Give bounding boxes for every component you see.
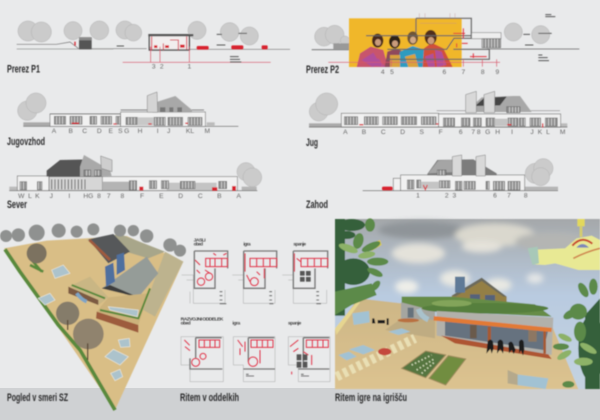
label: Ritem v oddelkih: Ritem v oddelkih [180, 392, 239, 404]
elevation: Jug: 7 8 [471, 129, 481, 136]
elevation: Sever: W [18, 193, 25, 200]
orange pergola [434, 318, 552, 330]
elevation: Jugovzhod: KL [186, 128, 194, 135]
elevation: Jug: K [538, 129, 543, 136]
elevation: Sever: E [159, 193, 164, 200]
label: Prerez P1: Prerez P1 [7, 64, 40, 76]
silhouettes [372, 318, 524, 356]
sky [335, 219, 600, 389]
main building [102, 257, 158, 297]
label: Pogled v smeri SZ: Pogled v smeri SZ [7, 392, 68, 404]
elevation: Jugovzhod: H [138, 128, 143, 135]
elevation: Jugovzhod: I [157, 128, 159, 135]
plan titles: obed [181, 321, 191, 327]
elevation: Sever: 8 [120, 193, 124, 200]
top row red furniture [195, 253, 328, 286]
elevation: Zahod [363, 155, 558, 199]
plan titles: spanje [293, 242, 306, 248]
elevation: Jug [309, 91, 567, 136]
elevation: Jug: B [362, 129, 367, 136]
section with poster: Prerez P2: 5 [390, 69, 394, 76]
elevation: Sever: K [35, 193, 40, 200]
band figures [357, 30, 453, 67]
flower beds [402, 351, 446, 378]
label: Ritem igre na igrišču: Ritem igre na igrišču [335, 392, 407, 404]
plan titles [181, 238, 306, 327]
section with poster: Prerez P2: 8 [481, 69, 485, 76]
bottom row plan walls [190, 338, 329, 369]
elevation: Jugovzhod: S [118, 128, 123, 135]
plan titles: obed [194, 242, 203, 248]
elevation: Jug: D [400, 129, 405, 136]
elevation: Sever: A [236, 193, 241, 200]
elevation: Sever [9, 155, 262, 200]
elevation: Zahod: 6 [493, 192, 497, 199]
clouds [378, 221, 588, 293]
elevation: Jugovzhod [18, 92, 238, 135]
solar roof block [88, 234, 130, 263]
top row plan walls [194, 251, 328, 288]
green roof [402, 297, 552, 317]
elevation: Sever: HG [83, 193, 93, 200]
elevation: Jugovzhod: E [108, 128, 113, 135]
section with poster: Prerez P2: 4 [381, 69, 385, 76]
elevation: Jugovzhod: J [167, 128, 170, 135]
floor plans: Ritem v oddelkih [181, 238, 330, 382]
elevation: Sever: C [198, 193, 203, 200]
elevation: Jug: A [343, 129, 348, 136]
elevation: Zahod: 7 [507, 192, 511, 199]
site ground [4, 236, 183, 410]
elevation: Zahod: 8 [524, 192, 528, 199]
trees [315, 23, 550, 46]
elevation: Jugovzhod: D [97, 128, 102, 135]
section with poster: Prerez P2: 7 [461, 69, 465, 76]
plan titles: spanje [288, 321, 302, 327]
elevation: Sever: 7 [107, 193, 111, 200]
pavilion [437, 311, 553, 355]
ground [335, 298, 578, 389]
section with poster: Prerez P2: 6 [442, 69, 446, 76]
elevation: Sever: F [140, 193, 144, 200]
elevation: Jugovzhod: C [82, 128, 87, 135]
plan titles: igra [232, 321, 241, 327]
elevation: Jug: H [495, 129, 500, 136]
elevation: Sever: B [217, 193, 222, 200]
section with poster: Prerez P2 [312, 13, 579, 76]
section with poster: Prerez P2: 9 [495, 69, 499, 76]
elevation: Zahod: 2 [445, 192, 449, 199]
elevation: Sever: D [178, 193, 183, 200]
small wing [401, 302, 435, 320]
elevation: Jug: J [530, 129, 534, 136]
elevation: Jug: 6 [459, 129, 463, 136]
elevation: Jug: L [546, 129, 550, 136]
section drawing: Prerez P1: 1 [187, 63, 191, 70]
zebra path [337, 338, 415, 377]
play blocks [338, 311, 548, 389]
elevation: Jugovzhod: M [205, 128, 210, 135]
elevation: Jug: F [439, 129, 443, 136]
plan titles: JASLI [194, 238, 206, 244]
elevation: Jug: G [485, 129, 490, 136]
elevation: Sever: I [68, 193, 70, 200]
plan titles: RAZVOJNI ODDELEK [181, 317, 224, 323]
elevation: Jug: M [560, 129, 565, 136]
chestnut leaves, right [553, 279, 600, 389]
wings [97, 293, 148, 325]
bottom row red furniture [184, 340, 328, 374]
section drawing: Prerez P1 [17, 21, 290, 70]
plan titles: igra [243, 242, 251, 248]
elevation: Zahod: 3 [452, 192, 456, 199]
elevation: Sever: J [50, 193, 53, 200]
trees [18, 21, 258, 45]
yellow poster [349, 18, 462, 67]
label: Sever: Sever [7, 199, 27, 211]
aerial view: Pogled v smeri SZ [0, 223, 186, 410]
label: Prerez P2: Prerez P2 [306, 64, 339, 76]
elevation: Zahod: 1 [416, 192, 420, 199]
pads [38, 265, 138, 381]
trees [0, 223, 186, 360]
elevation: Jug: I [511, 129, 513, 136]
elevation: Jug: S [419, 129, 424, 136]
label: Zahod: Zahod [306, 199, 328, 211]
section drawing: Prerez P1: 3 [152, 63, 156, 70]
elevation: Jug: C [381, 129, 386, 136]
render: Ritem igre na igrišču [335, 218, 600, 389]
section drawing: Prerez P1: 2 [160, 63, 164, 70]
elevation: Sever: 8 [97, 193, 101, 200]
elevation: Jugovzhod: G [124, 128, 129, 135]
orange terrace [441, 336, 552, 359]
elevation: Jugovzhod: A [52, 128, 57, 135]
back building [452, 278, 507, 303]
elevation: Sever: L [28, 193, 32, 200]
dimension ticks [220, 292, 321, 376]
caption band [0, 388, 600, 420]
chestnut leaves, top left [335, 218, 388, 316]
elevation: Jugovzhod: B [68, 128, 73, 135]
plan outlines [181, 275, 330, 382]
label: Jugovzhod: Jugovzhod [7, 136, 45, 148]
label: Jug: Jug [306, 137, 318, 149]
hedge [5, 249, 115, 410]
yellow submarine [528, 219, 600, 270]
